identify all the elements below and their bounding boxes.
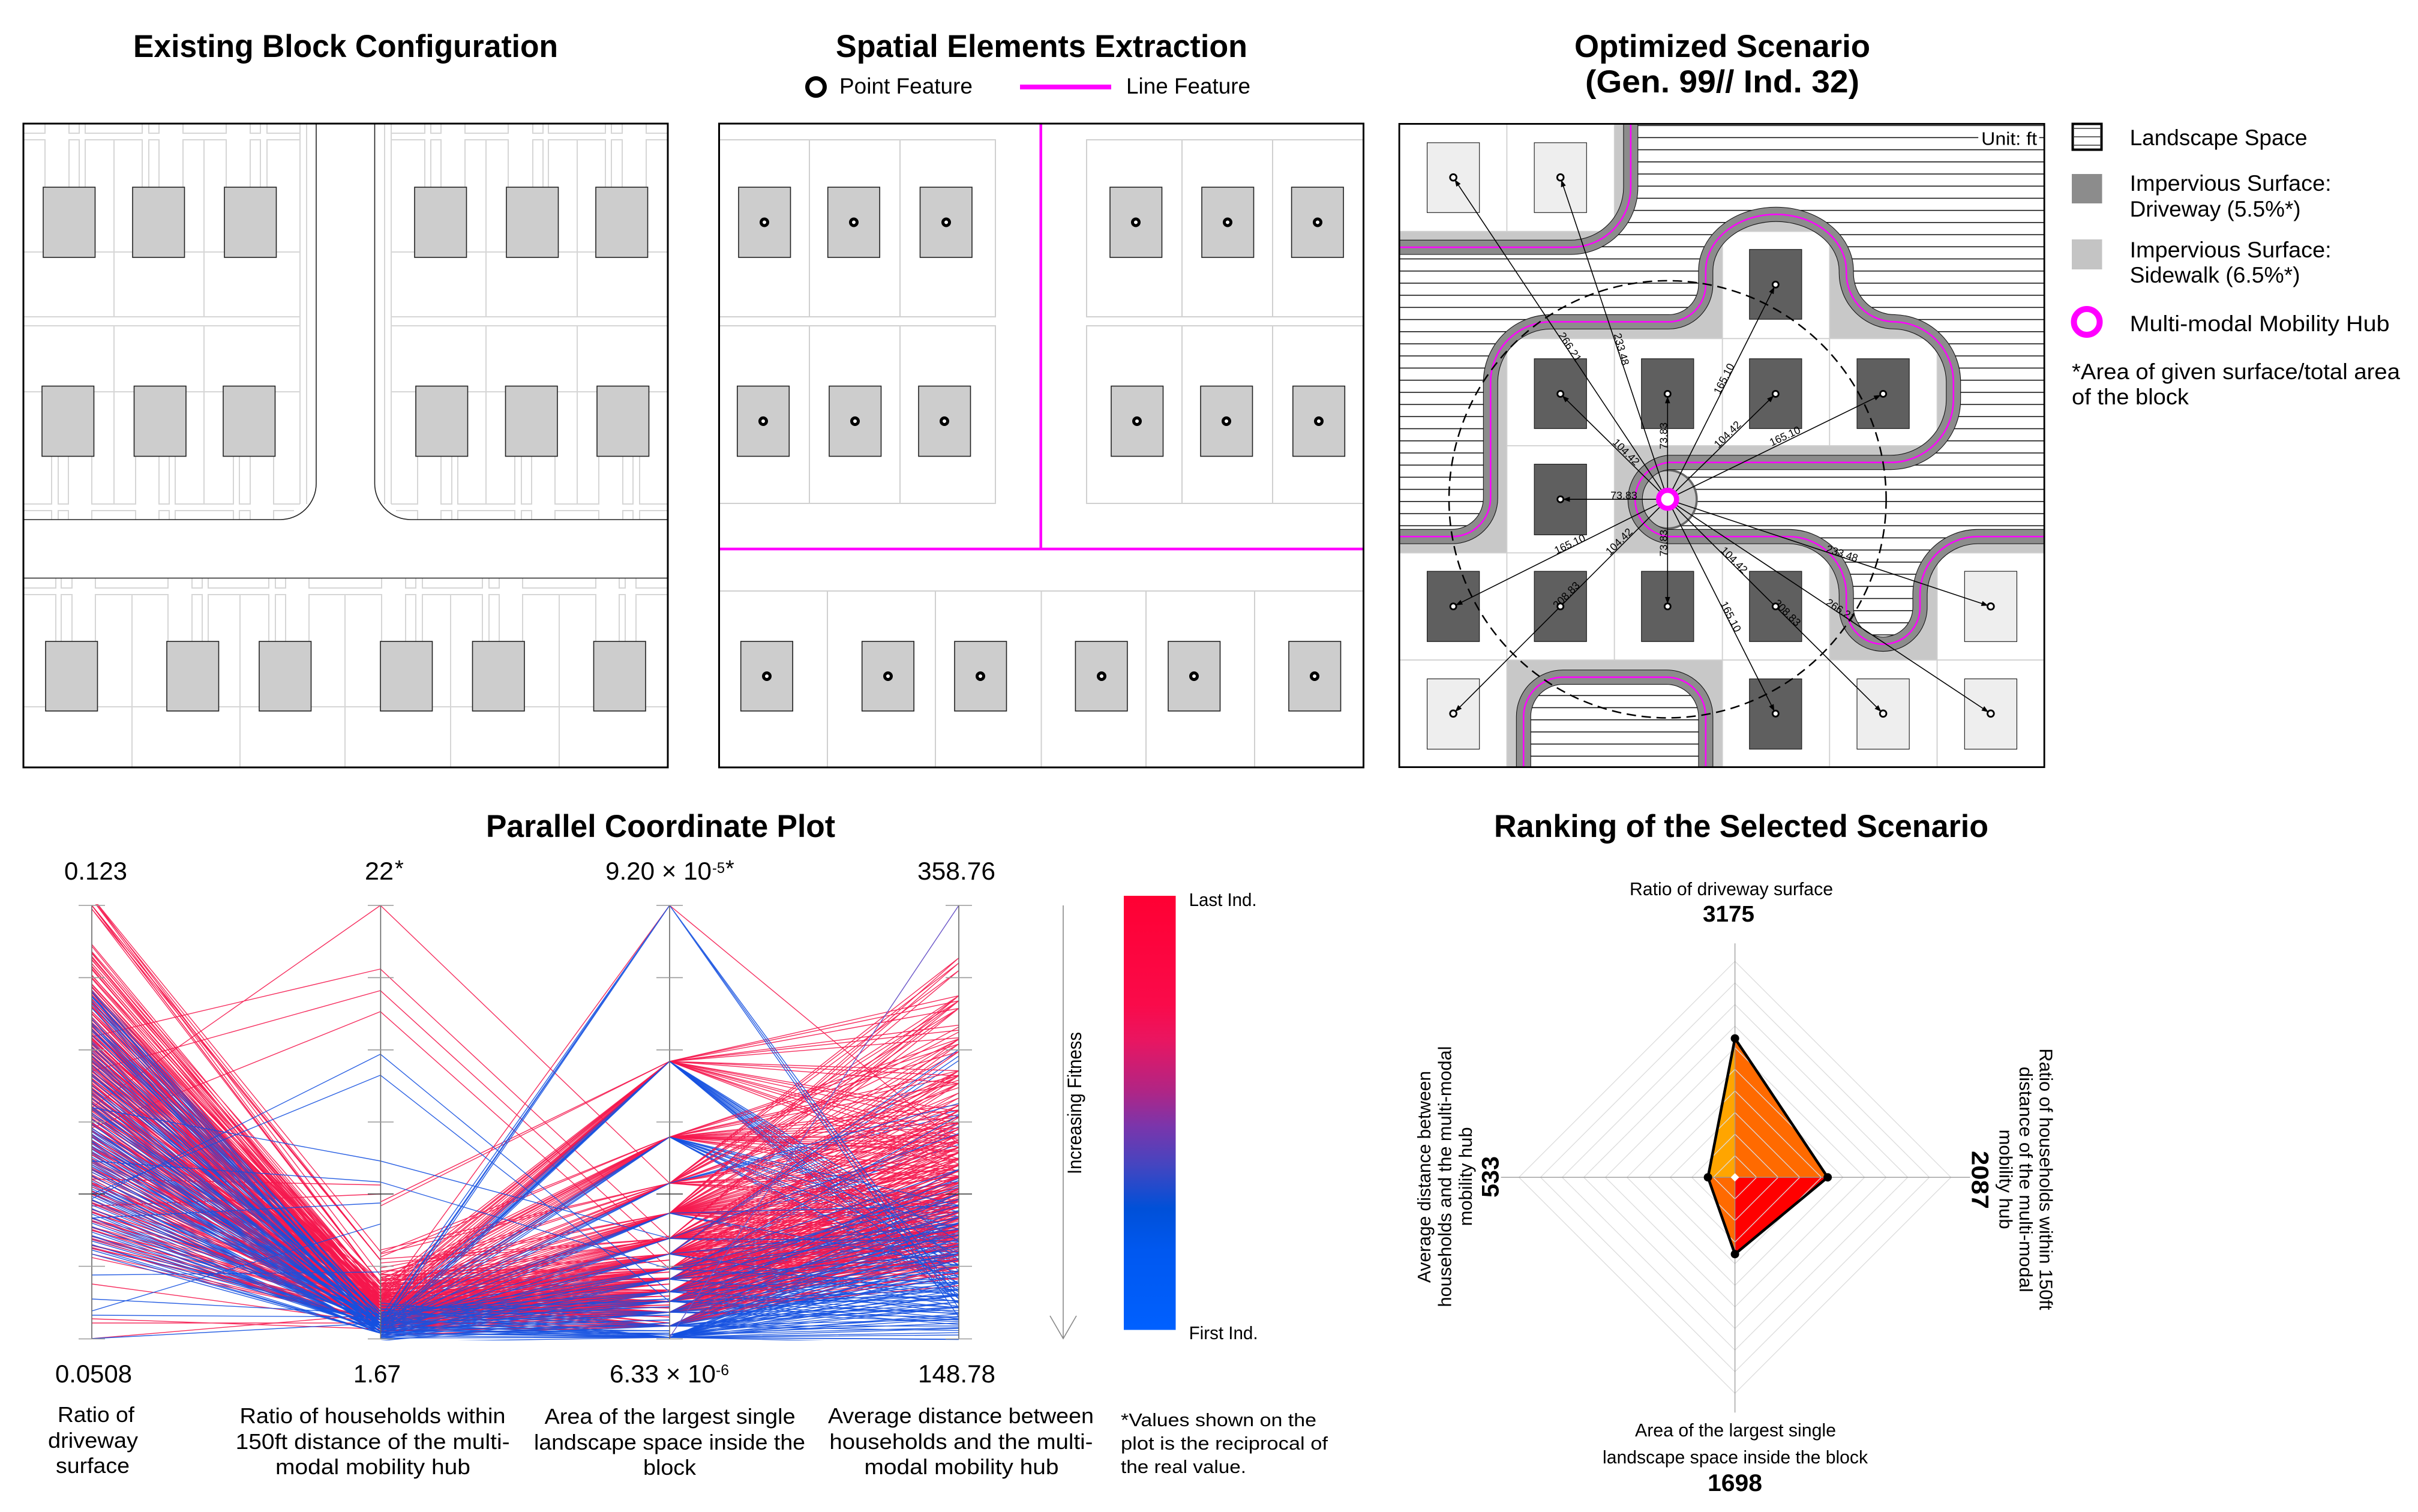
radar label: bottom [1603, 1420, 1868, 1496]
title: Spatial Elements Extraction: Spatial Elements Extraction [836, 29, 1247, 64]
distance labels: 73.83 [1658, 422, 1670, 449]
axis maximum values: * [725, 856, 734, 881]
axis maximum values: 9.20 × 10 [605, 857, 712, 885]
axis descriptions: households and the multi- [829, 1429, 1093, 1454]
distance labels: 165.10 [1768, 424, 1802, 448]
axes and ticks [79, 905, 972, 1339]
distance labels: 165.10 [1552, 532, 1587, 556]
colour bar: last to first individual: First Ind. [1189, 1322, 1258, 1343]
legend item: driveway: Impervious Surface: [2130, 171, 2332, 196]
axis maximum values: * [395, 856, 404, 881]
radar label: left: 533 [1477, 1156, 1504, 1198]
legend: point feature and line feature: Point Feature [839, 74, 973, 98]
distance labels: 104.42 [1610, 436, 1642, 468]
multi-modal mobility hub [1658, 490, 1676, 508]
axis minimum values: -6 [716, 1362, 729, 1379]
radar label: bottom: Area of the largest single [1635, 1420, 1836, 1441]
radar label: top: 3175 [1703, 902, 1754, 927]
distance labels: 104.42 [1712, 419, 1744, 450]
axis descriptions: surface [56, 1453, 130, 1478]
arrow: increasing fitness: Increasing Fitness [1064, 1032, 1085, 1174]
radar label: left: households and the multi-modal [1435, 1046, 1456, 1307]
legend: point feature and line feature: Line Feature [1126, 74, 1250, 98]
distance labels: 266.21 [1556, 330, 1584, 364]
axis descriptions: Ratio of households within [240, 1403, 505, 1428]
radar label: right: Ratio of households within 150ft [2036, 1048, 2057, 1310]
footnote: reciprocal values [1121, 1409, 1328, 1477]
distance labels: 208.83 [1550, 580, 1582, 611]
radar label: top: Ratio of driveway surface [1630, 878, 1833, 899]
legend footnote: of the block [2072, 385, 2189, 409]
colour bar: last to first individual [1124, 889, 1258, 1343]
legend footnote: *Area of given surface/total area [2072, 359, 2400, 384]
radar label: left: mobility hub [1455, 1127, 1476, 1226]
legend item: sidewalk: Impervious Surface: [2130, 238, 2332, 262]
driveways with centre lines [1399, 124, 2044, 767]
household point features [1450, 174, 1994, 717]
legend item: hub: Multi-modal Mobility Hub [2130, 311, 2390, 336]
distance labels: 104.42 [1603, 526, 1635, 557]
footnote: reciprocal values: the real value. [1121, 1456, 1246, 1477]
axis minimum values [55, 1360, 995, 1388]
panel: spatial elements extraction map [719, 124, 1363, 767]
distance labels: 266.21 [1824, 596, 1858, 624]
footnote: reciprocal values: plot is the reciprocal of [1121, 1433, 1328, 1454]
radar filled quadrants [1708, 1039, 1828, 1254]
radar data outline [1704, 1034, 1832, 1258]
distance labels: 73.83 [1658, 530, 1670, 556]
axis maximum values: 22 [365, 857, 394, 885]
legend item: sidewalk: Sidewalk (6.5%*) [2130, 263, 2300, 287]
distance arrows from hub to households [1453, 178, 1991, 713]
distance labels: 165.10 [1711, 361, 1737, 396]
legend item: sidewalk [2072, 238, 2332, 287]
axis descriptions: modal mobility hub [864, 1454, 1058, 1479]
legend item: driveway: Driveway (5.5%*) [2130, 197, 2301, 221]
buildings: dark within reach, light beyond [1427, 143, 2017, 749]
axis minimum values: 1.67 [353, 1360, 401, 1388]
legend footnote [2072, 359, 2400, 409]
axis minimum values: 0.0508 [55, 1360, 132, 1388]
axis minimum values: 6.33 × 10 [610, 1360, 716, 1388]
radar label: right: 2087 [1967, 1151, 1993, 1209]
radar label: bottom: landscape space inside the block [1603, 1447, 1868, 1468]
distance labels: 104.42 [1718, 544, 1750, 576]
axis descriptions [48, 1402, 1094, 1480]
radar label: top [1630, 878, 1833, 927]
title: Optimized Scenario: (Gen. 99// Ind. 32) [1585, 64, 1859, 100]
arrow: increasing fitness [1050, 905, 1085, 1339]
axis minimum values: 148.78 [918, 1360, 995, 1388]
distance labels: 73.83 [1610, 489, 1637, 501]
legend: surface types [2072, 124, 2400, 409]
title: Existing Block Configuration: Existing Block Configuration [133, 29, 558, 64]
legend item: driveway [2072, 171, 2332, 221]
title: Parallel Coordinate Plot: Parallel Coordinate Plot [486, 809, 835, 844]
footnote: reciprocal values: *Values shown on the [1121, 1409, 1316, 1430]
axis maximum values: -5 [712, 860, 725, 877]
axis maximum values [64, 856, 995, 885]
radar label: bottom: 1698 [1708, 1470, 1762, 1496]
axis descriptions: 150ft distance of the multi- [236, 1429, 510, 1454]
axis maximum values: 0.123 [64, 857, 127, 885]
axis descriptions: Ratio of [58, 1402, 135, 1427]
unit label: Unit: ft [1981, 128, 2037, 149]
panel: optimized scenario map [1399, 124, 2044, 767]
legend item: landscape space: Landscape Space [2130, 125, 2308, 150]
axis descriptions: block [643, 1455, 697, 1480]
title: Ranking of the Selected Scenario: Ranking of the Selected Scenario [1494, 809, 1988, 844]
radar label: right: mobility hub [1995, 1129, 2016, 1229]
colour bar: last to first individual: Last Ind. [1189, 889, 1257, 910]
chart: parallel coordinate plot [48, 856, 1094, 1480]
axis maximum values: 358.76 [917, 857, 995, 885]
distance labels [1550, 330, 1859, 634]
axis descriptions: Area of the largest single [545, 1404, 796, 1429]
axis descriptions: landscape space inside the [534, 1430, 805, 1454]
radar grid [1501, 943, 1970, 1412]
panel: existing block configuration map [23, 124, 668, 767]
radar label: left [1414, 1046, 1504, 1307]
distance labels: 233.48 [1612, 332, 1631, 367]
distance labels: 233.48 [1825, 543, 1859, 565]
radar label: right: distance of the multi-modal [2015, 1067, 2036, 1292]
axis descriptions: modal mobility hub [275, 1454, 470, 1479]
axis descriptions: driveway [48, 1428, 138, 1453]
chart: radar of scenario ranking [1414, 878, 2057, 1496]
radar label: right [1967, 1048, 2057, 1310]
distance labels: 208.83 [1771, 597, 1803, 629]
axis descriptions: Average distance between [828, 1403, 1094, 1428]
hub catchment circle [1639, 470, 1697, 529]
radar label: left: Average distance between [1414, 1071, 1435, 1283]
individuals lines [92, 897, 959, 1344]
title: Optimized Scenario [1574, 29, 1870, 100]
legend: point feature and line feature [808, 74, 1250, 98]
distance labels: 165.10 [1718, 599, 1744, 634]
dashed 150ft radius circle [1449, 281, 1886, 718]
title: Optimized Scenario: Optimized Scenario [1574, 29, 1870, 64]
